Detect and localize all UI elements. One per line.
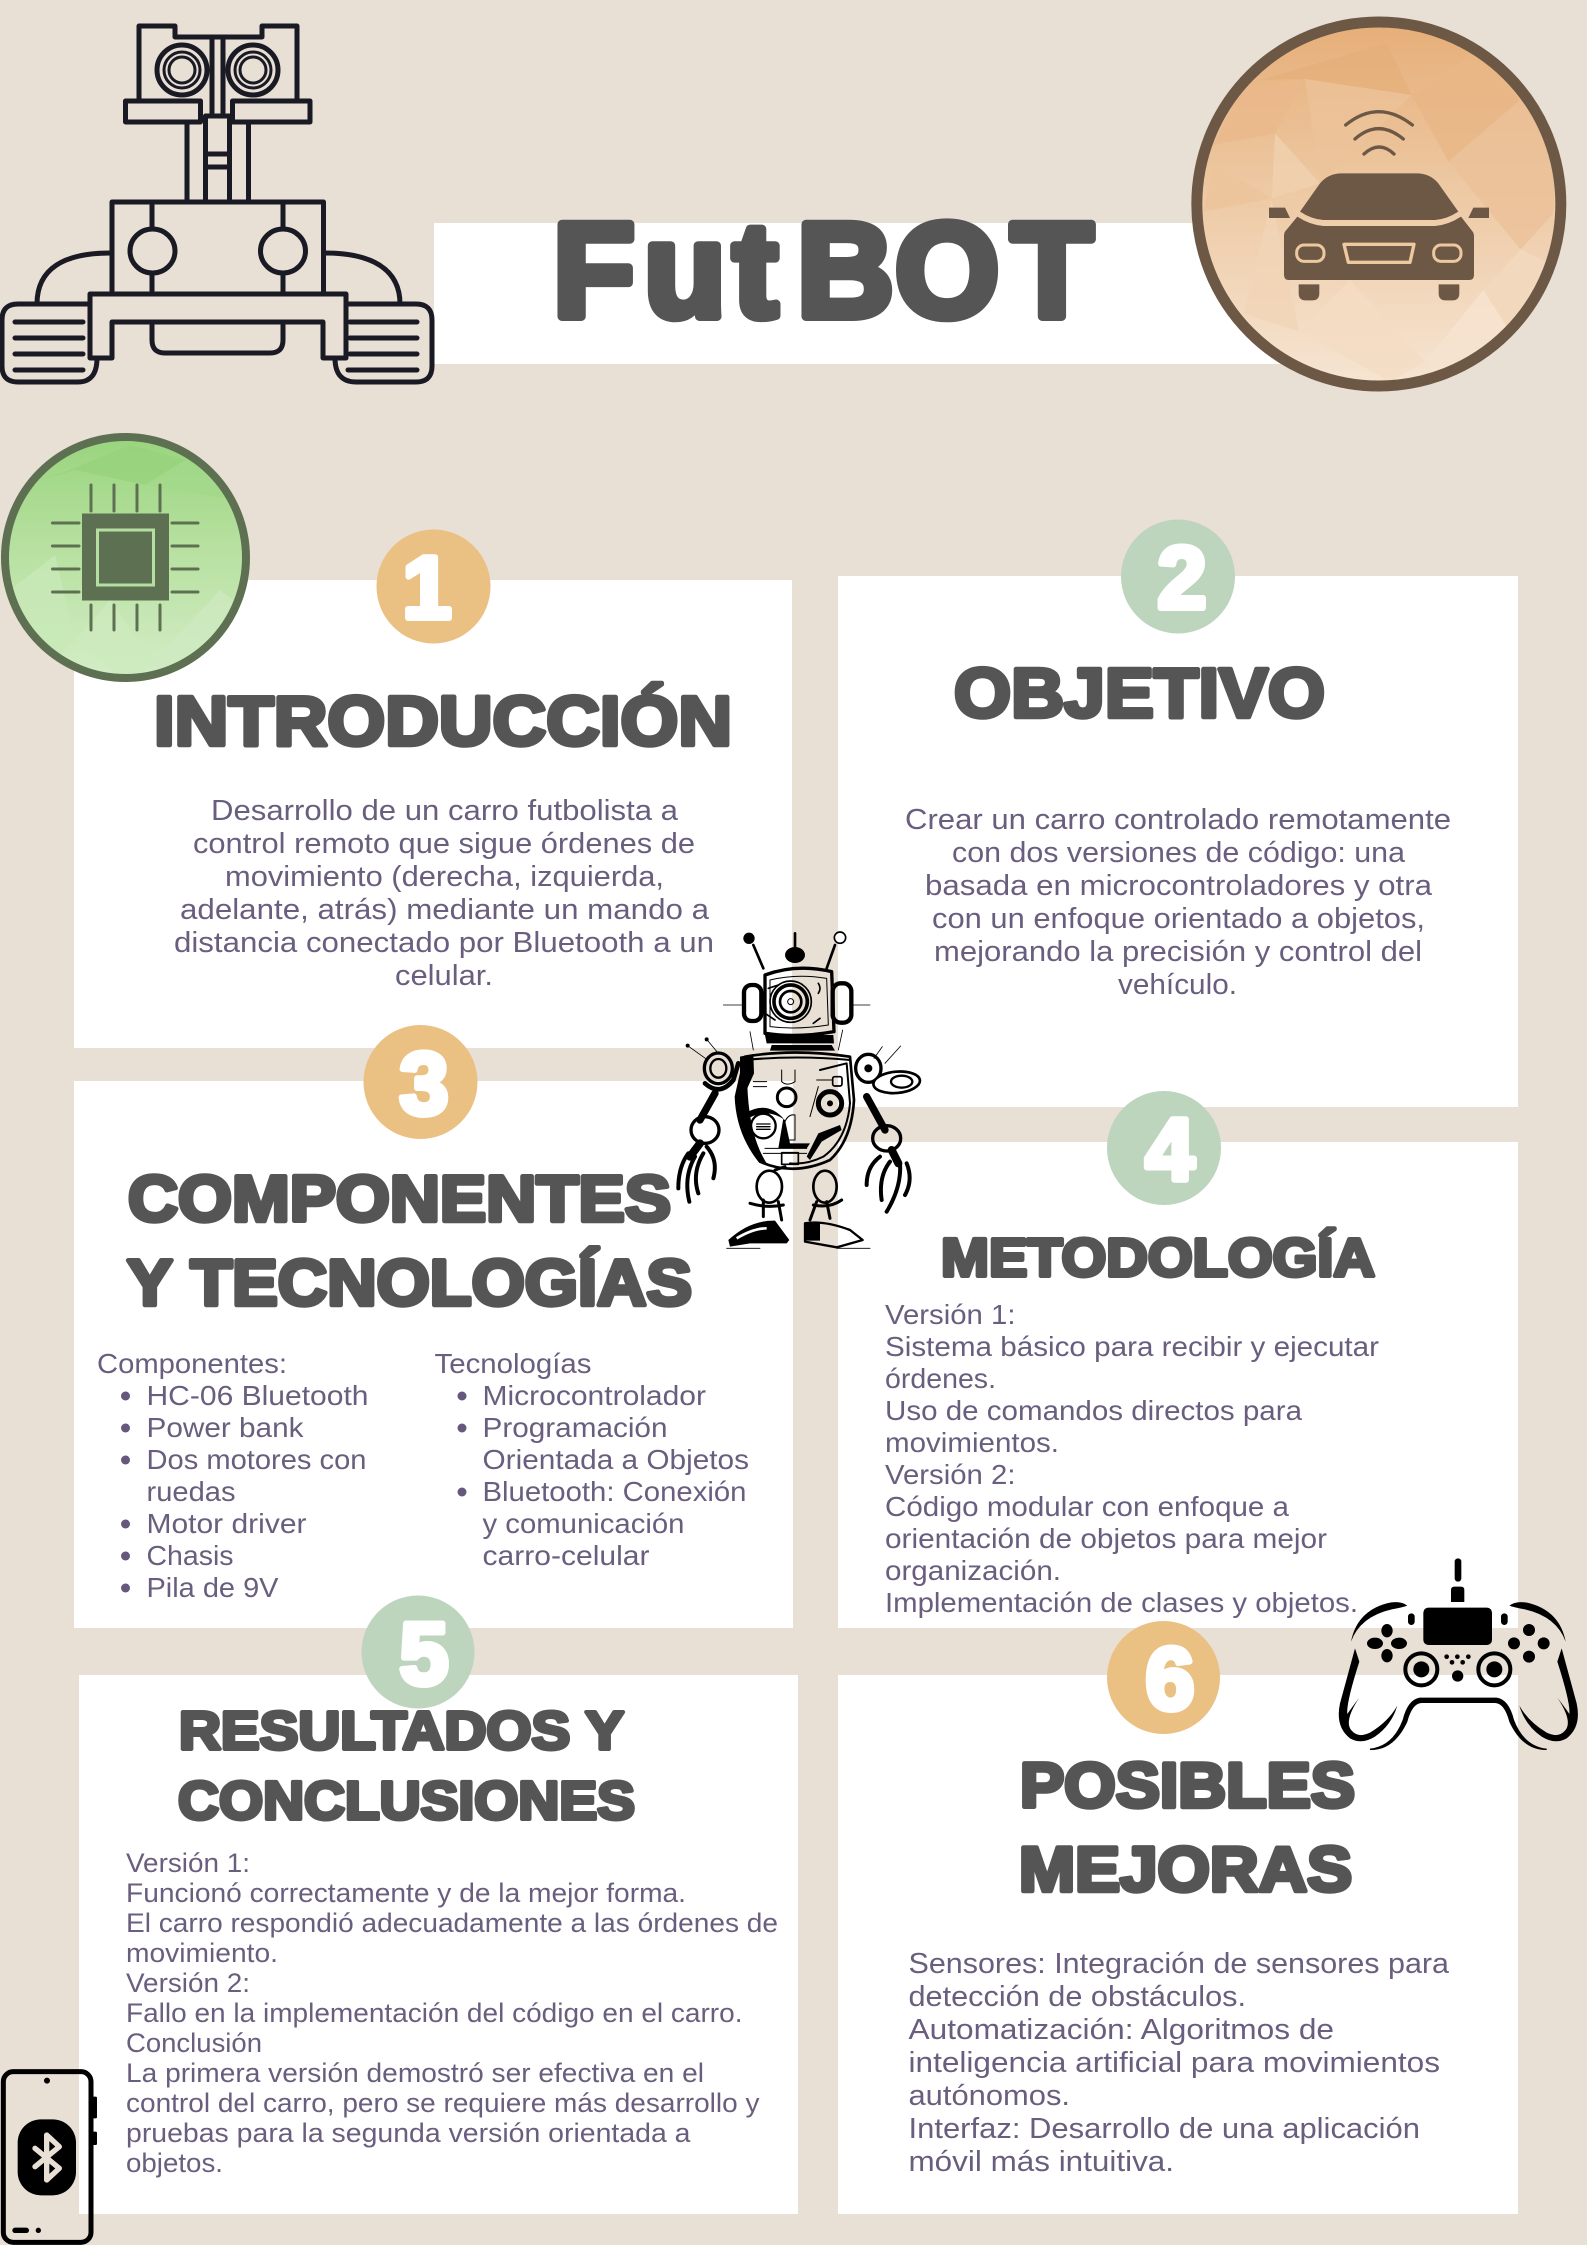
text: introducción: adelante, atrás) mediante un mando a: [180, 894, 709, 926]
heading: resultados y conclusiones: RESULTADOS Y: [179, 1701, 624, 1761]
text: introducción: distancia conectado por Bluetooth a un: [174, 927, 714, 959]
text: metodología: Versión 1:: [885, 1299, 1016, 1330]
right shoulder and arm: [874, 1046, 901, 1063]
heading: metodología: METODOLOGÍA: [941, 1228, 1375, 1288]
heading: componentes y tecnologías: [127, 1162, 692, 1319]
icon: vintage robot: [678, 932, 921, 1248]
icon: phone with bluetooth: [3, 2072, 97, 2242]
list: componentes: Chasis: [146, 1540, 234, 1571]
text: metodología: orientación de objetos para mejor: [885, 1523, 1327, 1554]
title band: [434, 196, 1314, 364]
text: objetivo: basada en microcontroladores y otra: [925, 870, 1432, 902]
text: metodología: órdenes.: [885, 1363, 996, 1394]
text: objetivo: Crear un carro controlado remotamente: [905, 804, 1451, 836]
panel: objetivo: [838, 520, 1518, 1107]
text: resultados y conclusiones: Funcionó correctamente y de la mejor forma.: [126, 1878, 686, 1908]
heading: posibles mejoras: [1019, 1751, 1355, 1905]
text: posibles mejoras: Interfaz: Desarrollo de una aplicación: [908, 2113, 1420, 2145]
legs and feet: [757, 1171, 782, 1203]
text: objetivo: con dos versiones de código: una: [952, 837, 1405, 869]
list: componentes: Componentes:: [97, 1348, 287, 1379]
text: objetivo: vehículo.: [1118, 969, 1237, 1001]
text: metodología: Versión 2:: [885, 1459, 1016, 1490]
text: introducción: celular.: [395, 960, 493, 992]
heading: resultados y conclusiones: [178, 1701, 635, 1831]
panel: componentes y tecnologías: [74, 1025, 793, 1628]
list: componentes: ruedas: [146, 1476, 236, 1507]
text: metodología: organización.: [885, 1555, 1061, 1586]
text: metodología: Uso de comandos directos para: [885, 1395, 1303, 1426]
list: componentes: [97, 1348, 368, 1603]
text: posibles mejoras: [908, 1948, 1449, 2178]
list: tecnologías: carro-celular: [482, 1540, 650, 1571]
icon: car with wifi in circle: [1197, 22, 1561, 386]
text: posibles mejoras: autónomos.: [908, 2080, 1070, 2112]
number badge 2: [1121, 520, 1235, 634]
text: objetivo: [905, 804, 1451, 1001]
number badge 4: [1107, 1091, 1221, 1205]
icon: game controller: [1339, 1558, 1578, 1749]
text: resultados y conclusiones: control del carro, pero se requiere más desarrollo y: [126, 2088, 760, 2118]
text: resultados y conclusiones: [126, 1848, 778, 2178]
list: tecnologías: Microcontrolador: [482, 1380, 706, 1411]
antennas: [753, 933, 835, 968]
heading: resultados y conclusiones: CONCLUSIONES: [178, 1771, 635, 1831]
heading: componentes y tecnologías: Y TECNOLOGÍAS: [127, 1246, 692, 1319]
panel: metodología: [838, 1091, 1518, 1628]
list: componentes: Pila de 9V: [146, 1572, 279, 1603]
number badge 2: 2: [1158, 528, 1206, 627]
number badge 6: 6: [1146, 1629, 1194, 1728]
text: posibles mejoras: Sensores: Integración de sensores para: [908, 1948, 1449, 1980]
heading: introducción: INTRODUCCIÓN: [154, 682, 732, 760]
number badge 4: 4: [1146, 1100, 1195, 1199]
text: introducción: control remoto que sigue órdenes de: [193, 828, 695, 860]
icon: microchip in circle: [2, 434, 250, 682]
text: resultados y conclusiones: La primera versión demostró ser efectiva en el: [126, 2058, 704, 2088]
text: metodología: [885, 1299, 1379, 1618]
text: metodología: Sistema básico para recibir y ejecutar: [885, 1331, 1379, 1362]
list: componentes: HC-06 Bluetooth: [146, 1380, 368, 1411]
list: tecnologías: Bluetooth: Conexión: [482, 1476, 746, 1507]
text: introducción: movimiento (derecha, izquierda,: [225, 861, 664, 893]
text: metodología: Implementación de clases y objetos.: [885, 1587, 1358, 1618]
list: tecnologías: y comunicación: [482, 1508, 684, 1539]
heading: posibles mejoras: MEJORAS: [1019, 1835, 1352, 1905]
heading: componentes y tecnologías: COMPONENTES: [128, 1162, 671, 1235]
text: objetivo: con un enfoque orientado a objetos,: [932, 903, 1425, 935]
number badge 5: 5: [400, 1604, 448, 1703]
text: posibles mejoras: móvil más intuitiva.: [908, 2146, 1174, 2178]
list: componentes: Dos motores con: [146, 1444, 366, 1475]
number badge 5: [362, 1596, 474, 1708]
text: resultados y conclusiones: El carro respondió adecuadamente a las órdenes de: [126, 1908, 778, 1938]
number badge 1: 1: [403, 538, 451, 637]
text: resultados y conclusiones: objetos.: [126, 2148, 223, 2178]
title: FutBOT: [553, 196, 1093, 346]
icon: tracked robot: [2, 26, 432, 382]
list: componentes: Motor driver: [146, 1508, 306, 1539]
heading: posibles mejoras: POSIBLES: [1020, 1751, 1355, 1821]
text: metodología: Código modular con enfoque a: [885, 1491, 1290, 1522]
list: tecnologías: Programación: [482, 1412, 668, 1443]
number badge 6: [1107, 1621, 1220, 1734]
number badge 1: [376, 530, 490, 644]
text: resultados y conclusiones: Versión 1:: [126, 1848, 250, 1878]
text: resultados y conclusiones: Conclusión: [126, 2028, 262, 2058]
list: tecnologías: Orientada a Objetos: [482, 1444, 749, 1475]
number badge 3: 3: [400, 1034, 448, 1133]
text: resultados y conclusiones: movimiento.: [126, 1938, 278, 1968]
panel: resultados y conclusiones: [79, 1596, 798, 2214]
panel: introducción: [74, 530, 792, 1048]
list: tecnologías: Tecnologías: [434, 1348, 592, 1379]
text: posibles mejoras: detección de obstáculos.: [908, 1981, 1246, 2013]
text: resultados y conclusiones: Fallo en la implementación del código en el carro.: [126, 1998, 742, 2028]
text: metodología: movimientos.: [885, 1427, 1059, 1458]
text: posibles mejoras: inteligencia artificial para movimientos: [908, 2047, 1440, 2079]
left shoulder and arm: [688, 1039, 718, 1059]
text: introducción: [174, 795, 714, 992]
text: objetivo: mejorando la precisión y control del: [934, 936, 1422, 968]
number badge 3: [364, 1025, 478, 1139]
head: [765, 968, 834, 1035]
text: resultados y conclusiones: Versión 2:: [126, 1968, 250, 1998]
text: resultados y conclusiones: pruebas para la segunda versión orientada a: [126, 2118, 691, 2148]
panel: posibles mejoras: [838, 1621, 1518, 2214]
list: tecnologías: [434, 1348, 749, 1571]
list: componentes: Power bank: [146, 1412, 304, 1443]
text: introducción: Desarrollo de un carro futbolista a: [211, 795, 678, 827]
text: posibles mejoras: Automatización: Algoritmos de: [908, 2014, 1334, 2046]
torso: [736, 1052, 854, 1169]
heading: objetivo: OBJETIVO: [954, 654, 1325, 732]
